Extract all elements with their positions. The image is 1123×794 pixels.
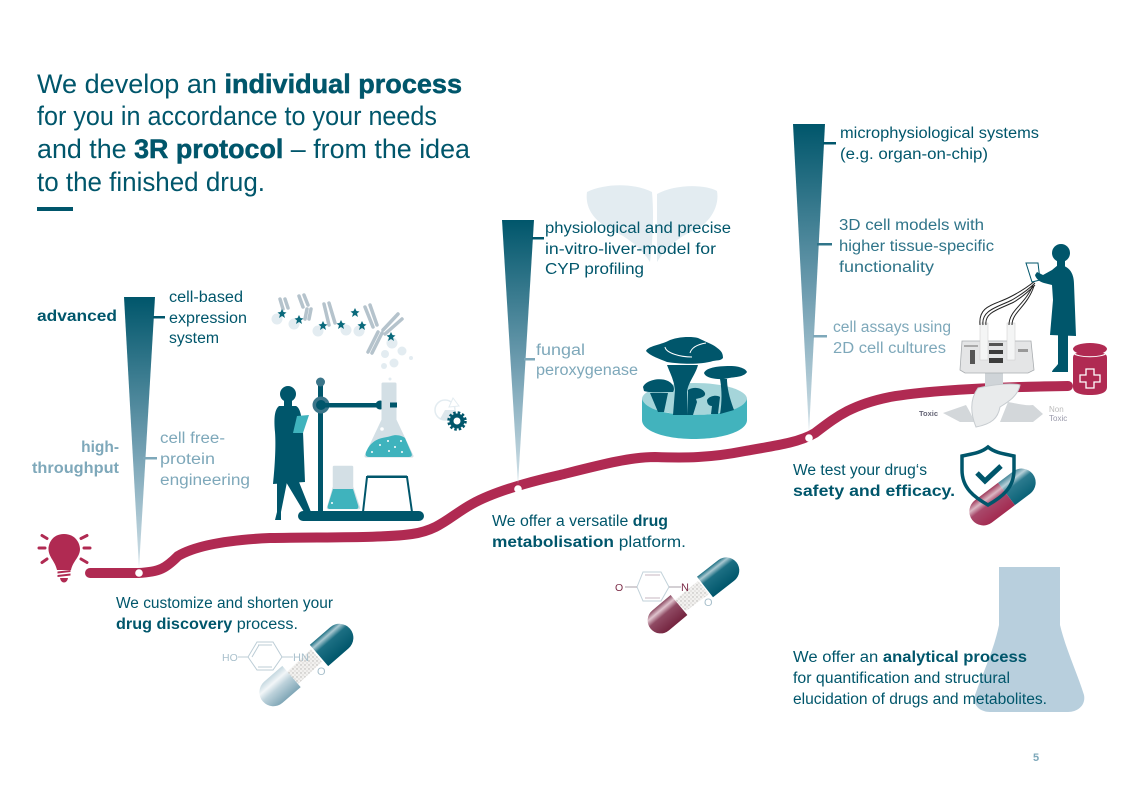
labels: step 1: throughput <box>32 460 119 477</box>
illustration: lab stand and flasks <box>298 378 424 521</box>
labels: step 2: fungal <box>536 342 585 359</box>
title: to the finished drug. <box>37 167 265 197</box>
text: drug metabolisation: We offer a versatile drug <box>492 513 668 530</box>
illustration: scientist <box>273 386 311 520</box>
labels: step 3: functionality <box>839 259 934 276</box>
text: safety and efficacy <box>793 462 955 500</box>
labels: step 3: microphysiological systems <box>840 125 1039 142</box>
icon: capsule with molecule (metabolisation): O <box>615 582 623 594</box>
title accent bar <box>37 207 73 211</box>
labels: step 1: engineering <box>160 472 250 489</box>
text: analytical process <box>793 649 1047 708</box>
wedge 3 with ticks <box>793 124 836 432</box>
icon: medicine jar <box>1073 343 1107 395</box>
labels: step 1: expression <box>169 310 247 327</box>
labels: step 2: CYP profiling <box>545 261 644 278</box>
milestone dots <box>135 434 813 577</box>
text: drug discovery <box>116 595 333 633</box>
title: for you in accordance to your needs <box>37 101 437 131</box>
icon: light bulb <box>39 534 90 582</box>
illustration: scientist with tablet <box>1026 244 1076 372</box>
flask background: analytical process <box>974 567 1084 712</box>
labels: step 3: cell assays using <box>833 319 951 336</box>
illustration: liver chip with arrows: Toxic <box>919 409 938 418</box>
text: drug discovery: drug discovery process. <box>116 616 298 633</box>
labels: step 1: protein <box>160 451 215 468</box>
text: drug discovery: We customize and shorten your <box>116 595 333 612</box>
text: analytical process: We offer an analytical process <box>793 649 1027 666</box>
illustration: liver chip with arrows <box>919 281 1067 427</box>
icon: capsule with molecule (metabolisation) <box>615 552 745 639</box>
labels: step 3 <box>833 125 1039 357</box>
text: safety and efficacy: safety and efficacy. <box>793 483 955 500</box>
icon: capsule with molecule (discovery): HN <box>293 652 309 664</box>
labels: step 3: (e.g. organ-on-chip) <box>840 146 988 163</box>
text: safety and efficacy: We test your drug‘s <box>793 462 927 479</box>
labels: step 3: higher tissue-specific <box>839 238 994 255</box>
title: We develop an individual process <box>37 69 462 99</box>
illustration: liver chip with arrows: Toxic <box>1049 414 1067 423</box>
illustration: liver chip with arrows: Non <box>1049 405 1064 414</box>
icon: capsule with molecule (discovery): HO <box>222 652 238 664</box>
labels: step 1: cell free- <box>160 430 225 447</box>
labels: step 3: 2D cell cultures <box>833 340 946 357</box>
wedge 2 with ticks <box>502 220 544 484</box>
labels: step 1 <box>32 289 250 489</box>
text: analytical process: for quantification and structural <box>793 670 1010 687</box>
labels: step 2 <box>536 220 731 379</box>
page number: 5 <box>1033 752 1039 764</box>
liver silhouette background <box>587 185 717 262</box>
icon: capsule with molecule (metabolisation): O <box>704 597 713 609</box>
text: drug metabolisation: metabolisation platform. <box>492 534 686 551</box>
icon: capsule with molecule (metabolisation): N <box>681 582 689 594</box>
icon: shield and capsule <box>962 447 1041 531</box>
main process line <box>90 386 1068 573</box>
labels: step 1: cell-based <box>169 289 243 306</box>
labels: step 3: 3D cell models with <box>839 217 984 234</box>
title <box>37 69 471 197</box>
icon: capsule with molecule (discovery): O <box>317 666 326 678</box>
labels: step 1: high- <box>81 439 119 456</box>
text: analytical process: elucidation of drugs and metabolites. <box>793 691 1047 708</box>
wedge 1 with ticks <box>124 297 165 568</box>
text: drug metabolisation <box>492 513 686 551</box>
labels: step 2: peroxygenase <box>536 362 638 379</box>
labels: step 2: in-vitro-liver-model for <box>545 241 716 258</box>
icon: pie chart and gear <box>435 398 466 430</box>
icon: capsule with molecule (discovery) <box>222 618 359 712</box>
title: and the 3R protocol – from the idea <box>37 134 471 164</box>
illustration: mushrooms in petri dish <box>642 337 747 439</box>
illustration: antibodies and stars <box>272 295 413 380</box>
labels: step 1: system <box>169 330 219 347</box>
labels: step 2: physiological and precise <box>545 220 731 237</box>
labels: step 1: advanced <box>37 308 117 325</box>
